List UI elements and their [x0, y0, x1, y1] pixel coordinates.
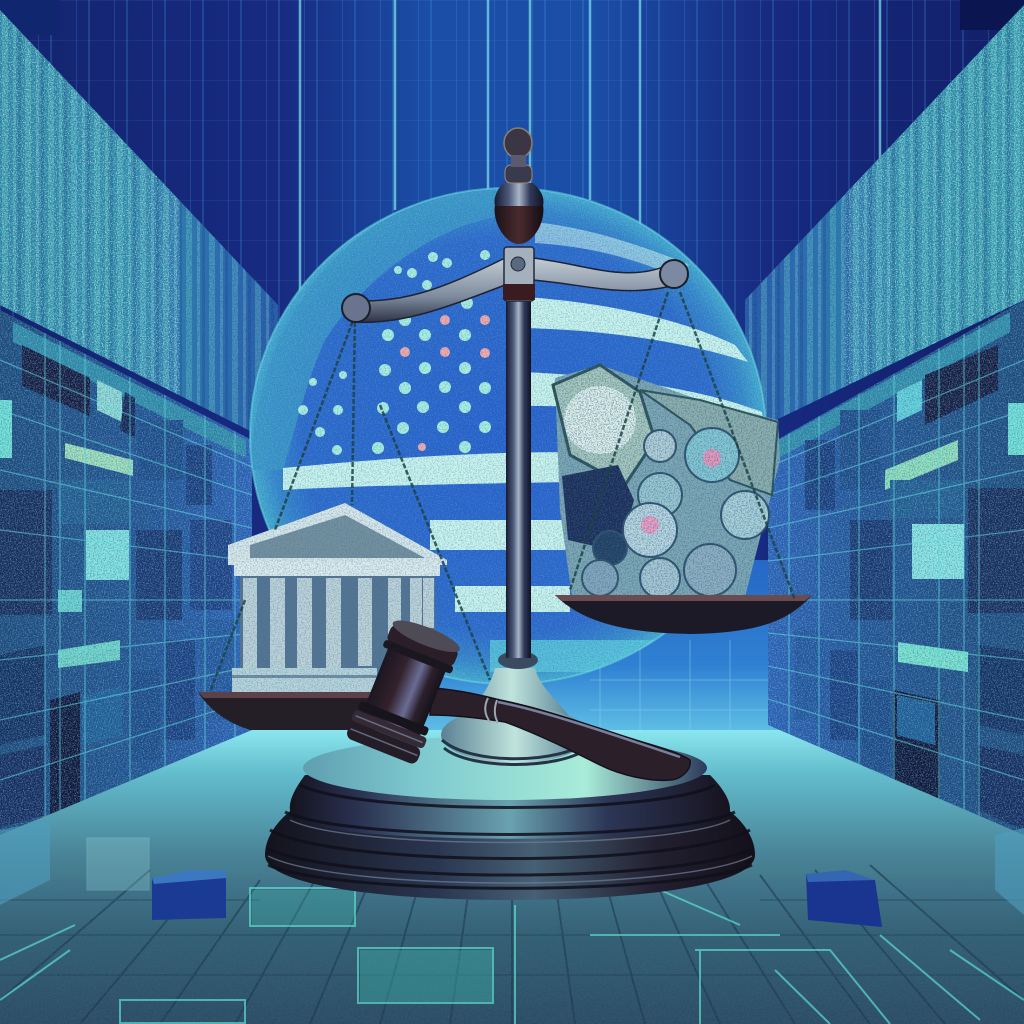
right wall panels — [764, 300, 1024, 840]
gavel handle — [430, 688, 690, 780]
money pile on right pan — [550, 360, 790, 600]
central scale pole and beam — [342, 128, 688, 658]
left floor block — [152, 870, 226, 920]
base upper tier — [290, 775, 730, 839]
flag stripes — [283, 222, 765, 672]
gavel — [344, 613, 690, 780]
banknote left — [553, 365, 655, 485]
base top plate — [303, 736, 707, 800]
banknote right — [640, 390, 778, 495]
round wooden base — [265, 736, 755, 900]
scale stand foot — [441, 651, 590, 764]
left data wall — [0, 0, 280, 450]
right scale pan — [555, 595, 812, 634]
dark coin block — [562, 465, 634, 552]
right data wall — [744, 0, 1024, 450]
floor with circuit traces — [0, 730, 1024, 1024]
left server wall — [0, 300, 260, 905]
gavel head — [344, 613, 466, 766]
globe with American flag — [250, 188, 770, 688]
translucent floor box — [87, 838, 149, 890]
flag stars — [298, 250, 491, 455]
courthouse building — [228, 503, 448, 693]
scale chains — [210, 292, 795, 692]
left wall panels — [0, 300, 260, 840]
left scale pan — [198, 692, 380, 730]
right server wall — [764, 300, 1024, 915]
base lower tier — [265, 795, 755, 900]
flag upper left fade — [250, 188, 508, 470]
right floor block — [806, 870, 882, 927]
